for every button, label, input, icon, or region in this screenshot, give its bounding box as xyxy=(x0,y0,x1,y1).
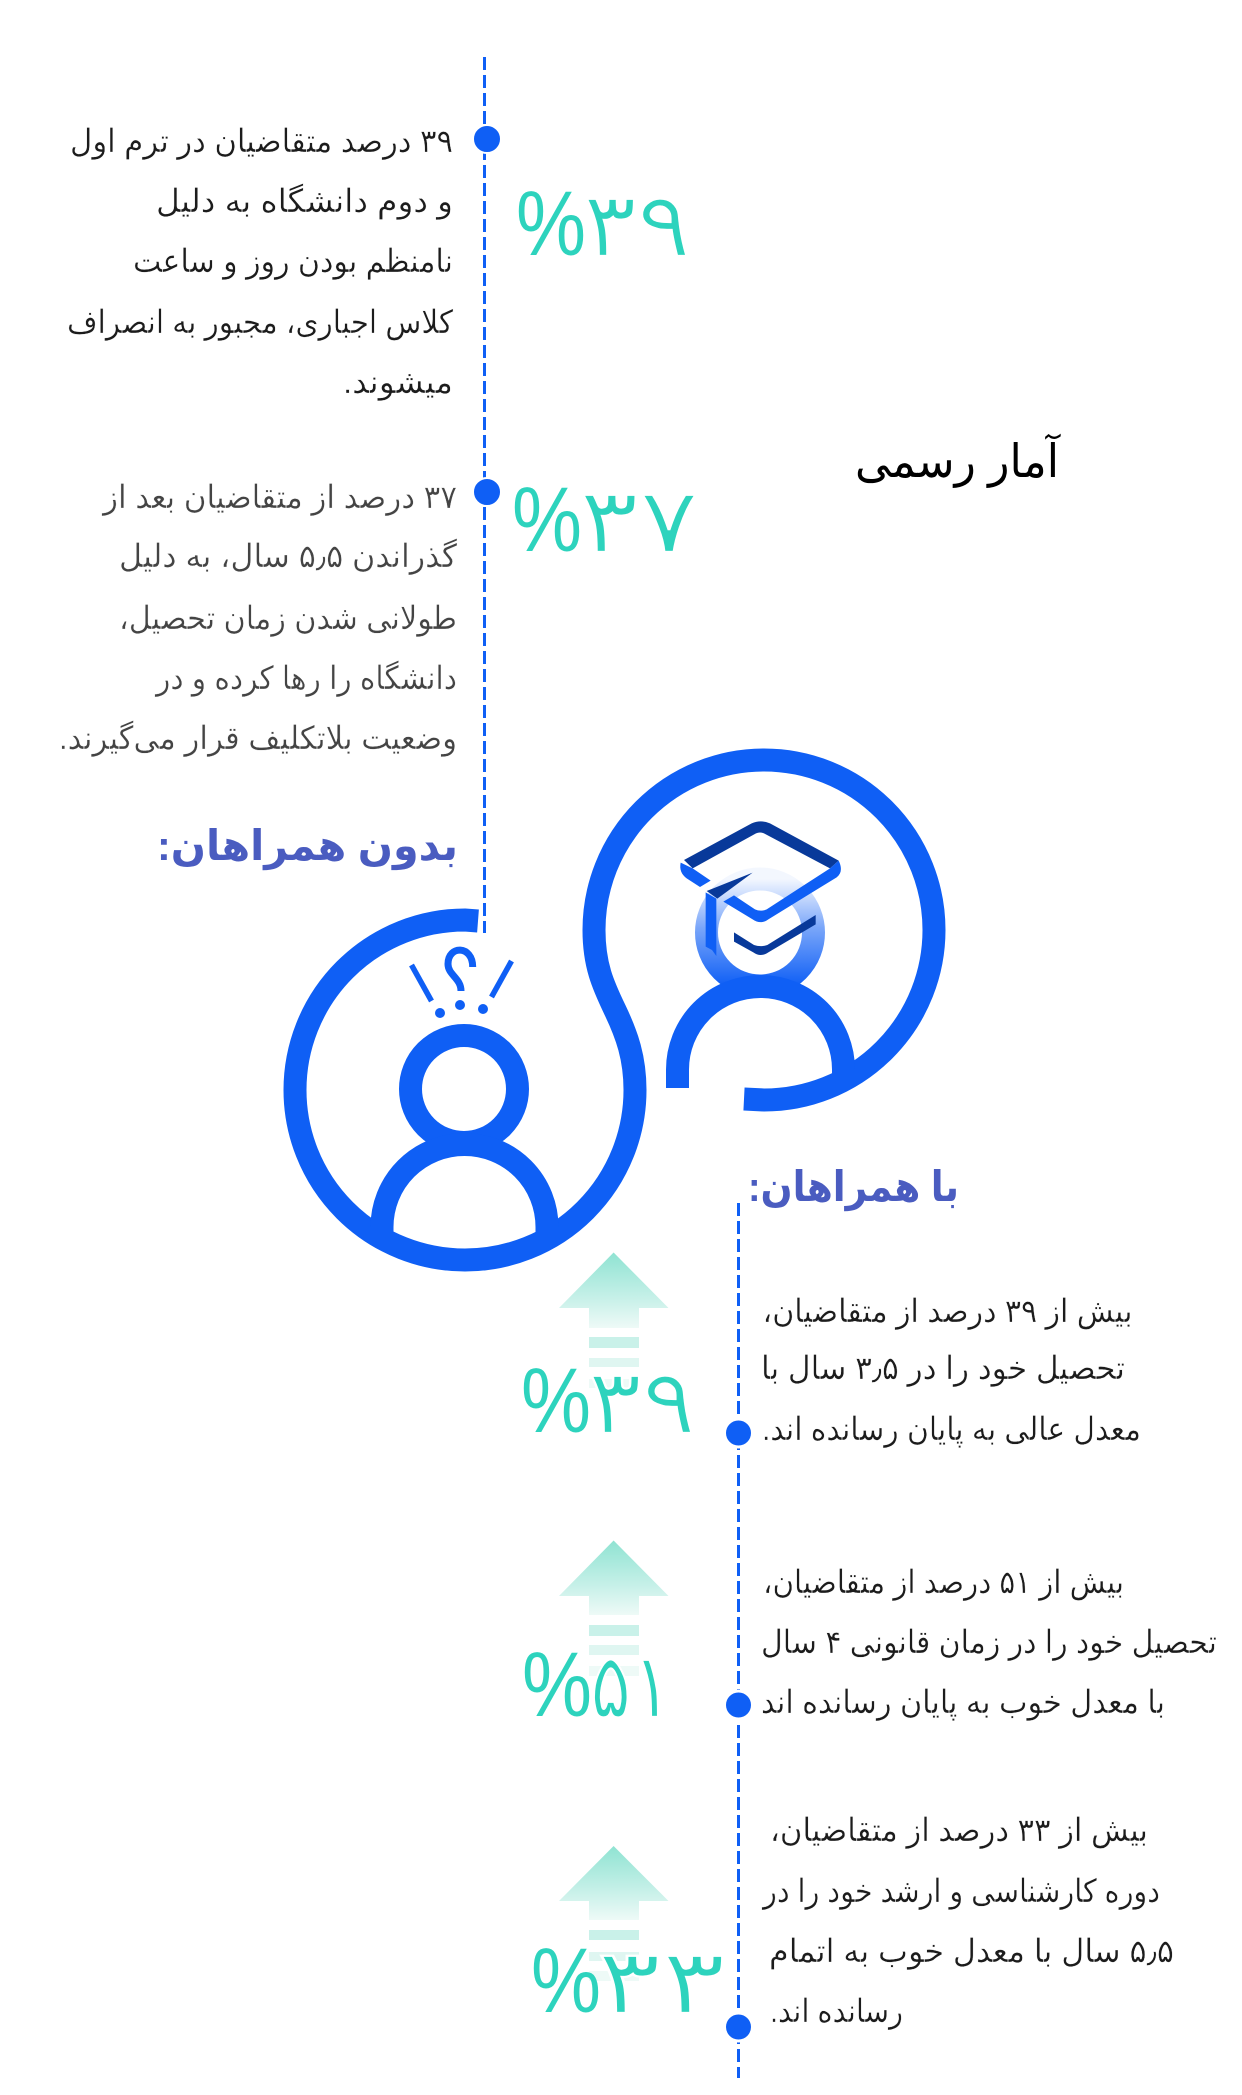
big number: 51 percent xyxy=(522,1634,673,1737)
text block: 37 percent undecided: گذراندن ۵٫۵ سال، به دلیل xyxy=(119,538,458,575)
timeline dot 33 xyxy=(724,2013,752,2041)
text block: with companions 33: دوره کارشناسی و ارشد خود را در xyxy=(761,1873,1160,1910)
text block: with companions 33: ۵٫۵ سال با معدل خوب به اتمام xyxy=(769,1933,1174,1970)
text block: 39 percent dropout xyxy=(67,123,454,401)
text block: with companions 39: معدل عالی به پایان رسانده اند. xyxy=(762,1411,1141,1448)
big number: 39 percent xyxy=(516,173,691,276)
big number: 39 percent xyxy=(521,1350,696,1453)
text block: with companions 33: رسانده اند. xyxy=(770,1993,903,2030)
heading: with companions: با همراهان: xyxy=(748,1163,959,1212)
text block: with companions 51: بیش از ۵۱ درصد از متقاضیان، xyxy=(763,1564,1124,1601)
text block: 37 percent undecided xyxy=(59,479,458,757)
big number: 37 percent: ۳۷ xyxy=(579,472,699,572)
text block: 37 percent undecided: وضعیت بلاتکلیف قرار می‌گیرند. xyxy=(59,720,457,757)
text block: 39 percent dropout: نامنظم بودن روز و ساعت xyxy=(133,243,453,280)
icon: S-shaped figure with two people xyxy=(295,760,934,1260)
big number: 39 percent: % xyxy=(521,1350,591,1452)
text block: 39 percent dropout: میشوند. xyxy=(343,364,453,401)
text block: with companions 39 xyxy=(761,1293,1141,1448)
text block: with companions 51: تحصیل خود را در زمان قانونی ۴ سال xyxy=(761,1624,1217,1661)
text block: with companions 51: با معدل خوب به پایان رسانده اند xyxy=(761,1684,1165,1721)
person without cap xyxy=(382,1036,547,1240)
big number: 33 percent: ۳۳ xyxy=(597,1933,726,2033)
timeline dot 39 xyxy=(473,125,501,153)
heading: without companions: بدون همراهان: xyxy=(157,822,458,871)
big number: 39 percent: % xyxy=(516,173,586,275)
arrow up 2 xyxy=(559,1540,668,1676)
text block: with companions 33: بیش از ۳۳ درصد از متقاضیان، xyxy=(770,1812,1148,1849)
text block: 37 percent undecided: ۳۷ درصد از متقاضیان بعد از xyxy=(101,479,457,516)
icon: question and exclamation marks xyxy=(412,950,512,1018)
timeline: without companions xyxy=(473,57,501,933)
icon: graduation cap xyxy=(680,821,841,956)
timeline dot 37 xyxy=(473,478,501,506)
title: آمار رسمی xyxy=(855,434,1061,488)
big number: 39 percent: ۳۹ xyxy=(588,1353,696,1453)
timeline dot 51 xyxy=(724,1691,752,1719)
text block: with companions 39: تحصیل خود را در ۳٫۵ سال با xyxy=(761,1350,1125,1387)
text block: with companions 51 xyxy=(761,1564,1217,1721)
arrow up 3 xyxy=(559,1846,668,1981)
text block: 37 percent undecided: طولانی شدن زمان تحصیل، xyxy=(119,600,457,637)
big number: 33 percent xyxy=(531,1930,726,2033)
big number: 51 percent: ۵۱ xyxy=(590,1637,673,1737)
arrow up 1 xyxy=(559,1252,668,1388)
text block: 39 percent dropout: کلاس اجباری، مجبور به انصراف xyxy=(67,304,454,341)
text block: 37 percent undecided: دانشگاه را رها کرده و در xyxy=(154,660,457,697)
text block: 39 percent dropout: و دوم دانشگاه به دلیل xyxy=(156,183,453,220)
person with graduation cap xyxy=(678,879,844,1088)
big number: 33 percent: % xyxy=(531,1930,601,2032)
big number: 39 percent: ۳۹ xyxy=(583,176,691,276)
big number: 37 percent: % xyxy=(512,469,582,571)
timeline dot 39 xyxy=(724,1419,752,1447)
S ribbon xyxy=(295,760,934,1260)
text block: 39 percent dropout: ۳۹ درصد متقاضیان در ترم اول xyxy=(70,123,453,160)
big number: 51 percent: % xyxy=(522,1634,592,1736)
text block: with companions 33 xyxy=(761,1812,1174,2030)
big number: 37 percent xyxy=(512,469,699,572)
text block: with companions 39: بیش از ۳۹ درصد از متقاضیان، xyxy=(763,1293,1132,1330)
timeline: with companions xyxy=(724,1203,752,2078)
